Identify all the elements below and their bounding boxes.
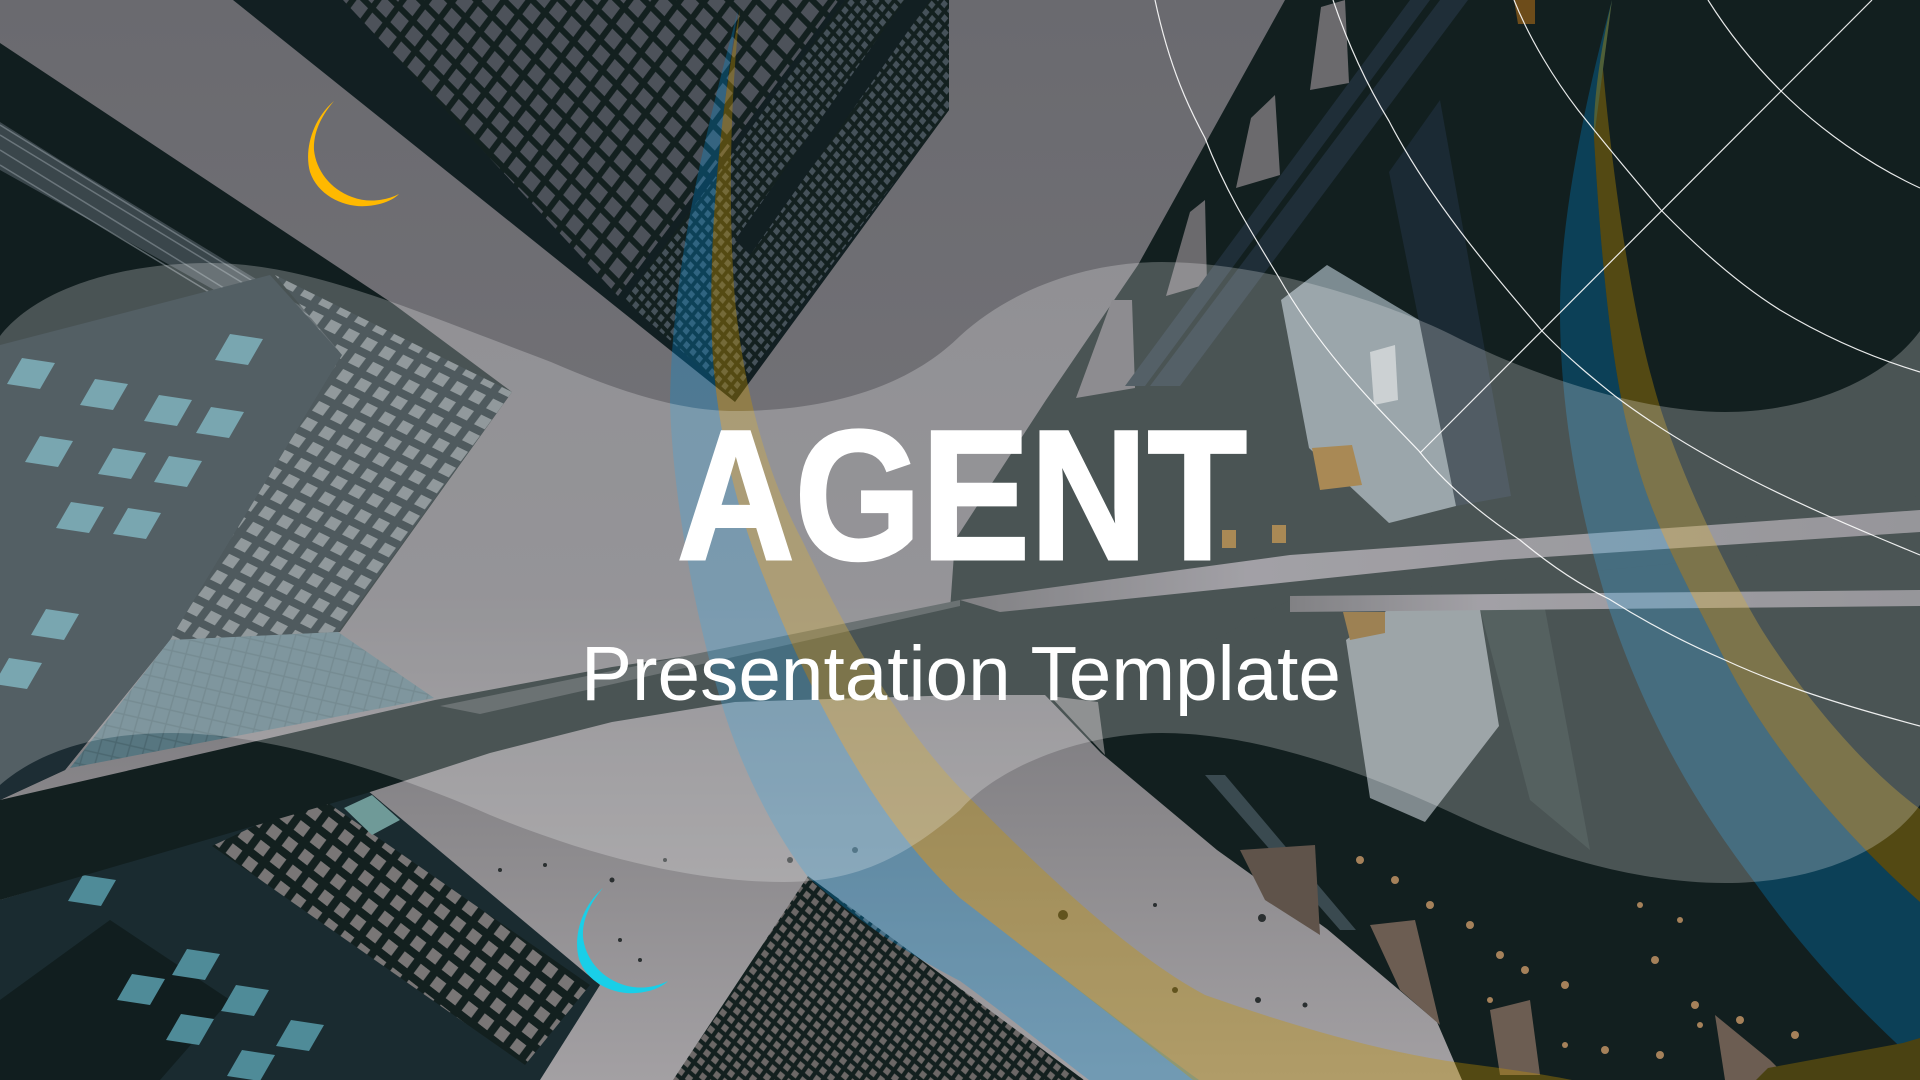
- blue arc: [1560, 0, 1920, 1065]
- wet road beam: [0, 496, 1920, 900]
- upper right building: [950, 0, 1920, 610]
- blue and gold arcs, left pair: [670, 10, 1572, 1080]
- lower left building: [0, 790, 600, 1080]
- raindrop specks: [498, 847, 1308, 1008]
- bottom centre tower: [673, 876, 1084, 1080]
- icon: cyan crescent moon: [577, 888, 668, 993]
- blue and gold arcs, right pair: [1560, 0, 1920, 1080]
- translucent white wave band: [0, 262, 1920, 883]
- top-left dark building: [0, 43, 512, 800]
- icon: yellow crescent moon: [308, 101, 399, 206]
- subtitle: Presentation Template: [581, 631, 1341, 717]
- top centre tower: [233, 0, 949, 402]
- gold arc tail, bottom right: [1756, 1038, 1920, 1080]
- blue arc: [670, 10, 1199, 1080]
- title: AGENT: [677, 393, 1247, 599]
- left building faces: [0, 275, 512, 800]
- gold arc: [711, 10, 1572, 1080]
- thin white arcs and line: [1155, 0, 1920, 726]
- lower right building: [960, 500, 1920, 1080]
- gold arc: [1594, 0, 1920, 902]
